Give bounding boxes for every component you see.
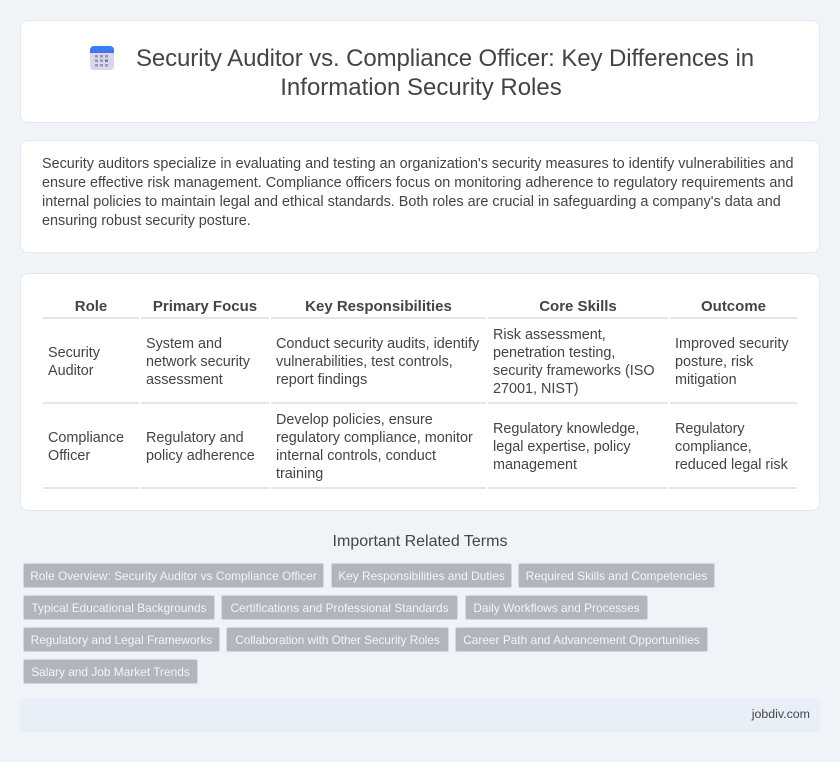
row: compliance officer: compliance, xyxy=(675,439,752,455)
table header row: Key Responsibilities xyxy=(305,298,452,315)
row: security auditor: assessment xyxy=(146,372,223,388)
related terms tags: Key Responsibilities and Duties xyxy=(338,569,505,583)
footer bar xyxy=(20,698,820,732)
row: security auditor: Auditor xyxy=(48,363,94,379)
intro text: ensure effective risk management. Compliance officers focus on monitoring adherence to regulatory requirements and xyxy=(42,175,793,191)
row: security auditor: 27001, NIST) xyxy=(493,381,579,397)
row: security auditor: Improved security xyxy=(675,336,789,352)
row: compliance officer: Regulatory knowledge, xyxy=(493,421,639,437)
intro text: Security auditors specialize in evaluating and testing an organization's security measures to identify vulnerabilities and xyxy=(42,156,793,172)
row: compliance officer: legal expertise, policy xyxy=(493,439,631,455)
related terms tags: Career Path and Advancement Opportunities xyxy=(463,633,700,647)
related terms heading: Important Related Terms xyxy=(333,533,507,550)
row: compliance officer xyxy=(48,412,788,482)
row: security auditor: Conduct security audits, identify xyxy=(276,336,479,352)
row: compliance officer: regulatory compliance, monitor xyxy=(276,430,473,446)
related terms tags: Salary and Job Market Trends xyxy=(31,665,190,679)
icon: calendar xyxy=(90,46,114,70)
row: compliance officer: Regulatory xyxy=(675,421,745,437)
row: security auditor: penetration testing, xyxy=(493,345,615,361)
row: security auditor: Security xyxy=(48,345,100,361)
row: security auditor: System and xyxy=(146,336,222,352)
row: compliance officer: internal controls, conduct xyxy=(276,448,436,464)
row: compliance officer: Develop policies, ensure xyxy=(276,412,433,428)
related terms tags: Role Overview: Security Auditor vs Compliance Officer xyxy=(30,569,317,583)
related terms tags xyxy=(23,563,715,684)
row: security auditor xyxy=(48,327,789,397)
table header row: Outcome xyxy=(701,298,766,315)
row: compliance officer: Compliance xyxy=(48,430,124,446)
comparison table panel xyxy=(20,273,820,511)
related terms tags: Daily Workflows and Processes xyxy=(473,601,640,615)
related terms tags: Required Skills and Competencies xyxy=(526,569,707,583)
title xyxy=(136,45,754,101)
table header row: Role xyxy=(75,298,107,315)
row: compliance officer: management xyxy=(493,457,577,473)
row: security auditor: posture, risk xyxy=(675,354,753,370)
intro text: ensuring robust security posture. xyxy=(42,213,251,229)
row: security auditor: report findings xyxy=(276,372,367,388)
title: Information Security Roles xyxy=(280,74,562,101)
row: compliance officer: policy adherence xyxy=(146,448,255,464)
table header row xyxy=(75,298,766,315)
header panel xyxy=(20,20,820,123)
related terms tags: Regulatory and Legal Frameworks xyxy=(31,633,212,647)
intro text: internal policies to maintain legal and ethical standards. Both roles are crucial in safeguarding a company's data and xyxy=(42,194,781,210)
row: security auditor: Risk assessment, xyxy=(493,327,606,343)
row: compliance officer: reduced legal risk xyxy=(675,457,788,473)
intro text xyxy=(42,156,793,229)
intro panel xyxy=(20,140,820,253)
title: Security Auditor vs. Compliance Officer: Key Differences in xyxy=(136,45,754,72)
table header row: Primary Focus xyxy=(153,298,257,315)
related terms tags: Certifications and Professional Standards xyxy=(230,601,449,615)
row: security auditor: vulnerabilities, test controls, xyxy=(276,354,453,370)
related terms tags: Collaboration with Other Security Roles xyxy=(235,633,440,647)
footer source: jobdiv.com xyxy=(752,707,810,721)
row: compliance officer: Regulatory and xyxy=(146,430,244,446)
related terms tags: Typical Educational Backgrounds xyxy=(31,601,207,615)
row: compliance officer: Officer xyxy=(48,448,90,464)
row: security auditor: security frameworks (ISO xyxy=(493,363,655,379)
table header row: Core Skills xyxy=(539,298,617,315)
row: compliance officer: training xyxy=(276,466,323,482)
row: security auditor: mitigation xyxy=(675,372,737,388)
row: security auditor: network security xyxy=(146,354,250,370)
